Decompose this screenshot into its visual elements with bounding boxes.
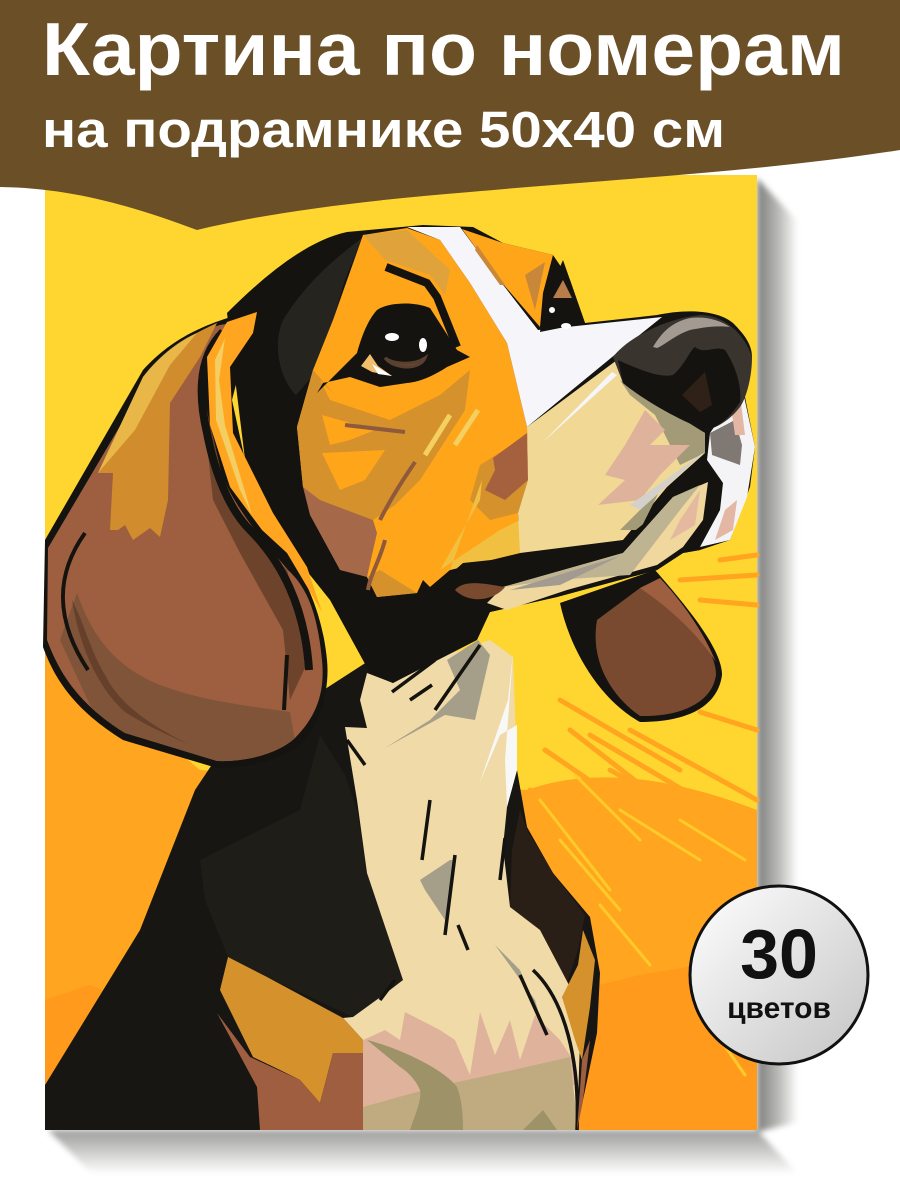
face darker orange [297,370,528,597]
chest dark hook [367,1040,557,1130]
right eye [540,260,585,332]
lower lip [487,482,708,610]
chest olive shade [360,1057,578,1130]
chest orange patch [217,930,595,1130]
ear pale rim [98,333,197,473]
chest pink fur [363,1012,577,1115]
dog painting [43,225,755,1130]
muzzle white streak [543,372,617,442]
badge: 30 colours: цветов [727,992,831,1025]
title: Картина по номерам [42,7,845,91]
upper lip [700,387,755,547]
black head patch [278,238,362,395]
muzzle brown mark [485,433,528,500]
badge: 30 colours: 30 [740,915,818,993]
nose [613,315,752,430]
white blaze and snout [407,227,662,427]
painting background [45,175,757,1130]
muzzle [518,360,705,553]
sun rays [530,555,757,1075]
ear lower shade [60,593,300,770]
left ear [43,310,328,770]
lip pink [455,583,505,599]
face orange [297,228,528,597]
eye [317,304,470,393]
face brown cheek [303,487,377,577]
muzzle olive band [620,380,705,530]
mouth [447,470,723,612]
neck white streak [480,653,517,807]
brow marks [363,230,450,295]
ear yellow strip [207,312,322,612]
banner [0,0,900,230]
ear brown fill [47,324,323,761]
ear orange highlight [98,323,217,540]
canvas shadow [48,178,798,1174]
neck gray markings [385,640,545,1035]
subtitle: на подрамнике 50х40 см [42,101,725,158]
badge: 30 colours [690,886,868,1064]
hanging ear [560,570,722,722]
neck fur lines [347,645,577,1130]
face lit patch [322,415,385,490]
head silhouette [227,225,755,683]
ear inner line [202,332,309,670]
right neck shadow [510,810,585,997]
neck and chest [343,640,580,1130]
dog body [45,660,600,1130]
ear inner shade [200,380,310,700]
body lighter fur [200,735,403,1017]
forehead right orange [462,229,553,327]
muzzle pink [598,410,690,505]
